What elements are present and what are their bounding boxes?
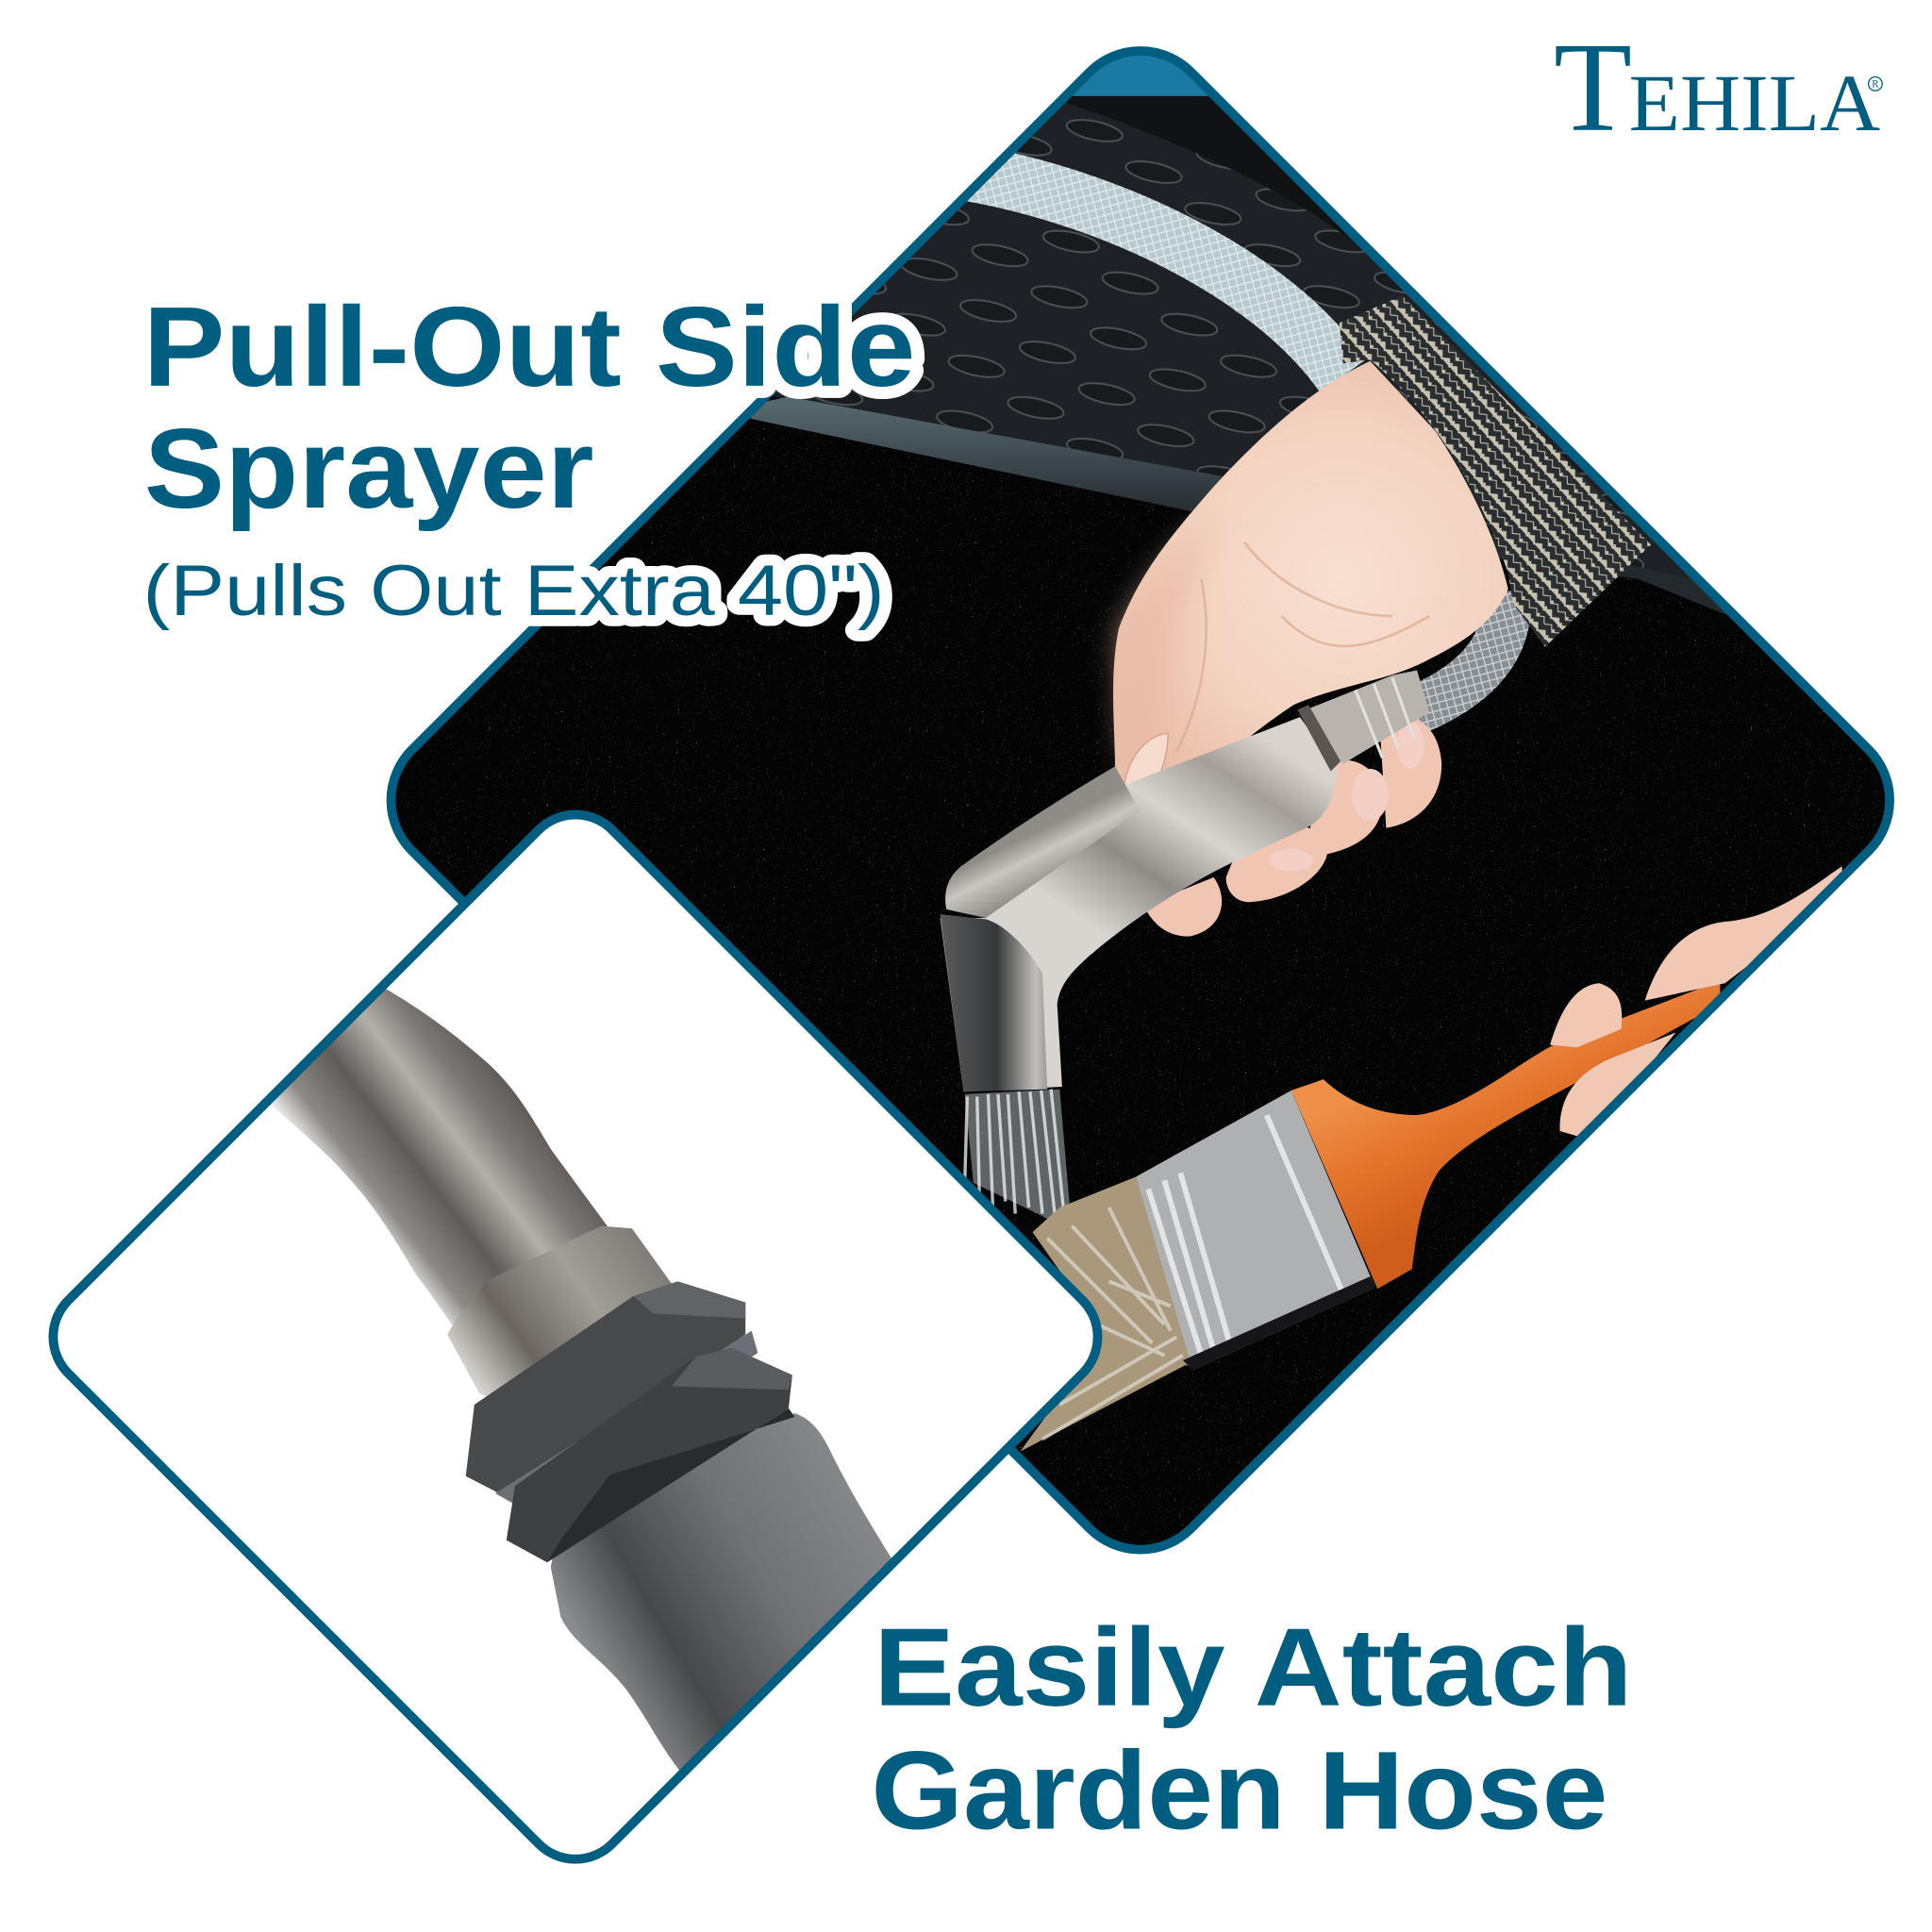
brush handle [1291,981,1720,1289]
dark mat shape [1066,96,1347,236]
thumb nail [1124,732,1169,785]
brushed nickel pipe [265,979,610,1331]
finger nails [1269,722,1424,871]
palm creases [1176,542,1429,752]
registered mark: R [1872,79,1879,91]
large diamond outline [361,22,1919,1579]
pipe collar [447,1226,690,1400]
registered mark [1869,77,1882,91]
fingers [1143,717,1441,937]
logo: Tehila: EHILA [1629,58,1880,148]
gray hose connector body [551,1413,899,1787]
hex nut lower [507,1348,792,1562]
heading: Easily Attach Garden Hose: Easily Attach [874,1606,1633,1729]
heading: Easily Attach Garden Hose [871,1606,1633,1852]
rubber ring [547,1408,794,1562]
hex nut upper [466,1281,745,1497]
sleeve knit cuff [1340,295,1651,647]
hose lower [1411,591,1507,712]
subheading: pulls out extra 40 inches: (Pulls Out Extra 40") [143,551,885,631]
second hand holding brush [1550,866,1842,1140]
heading: Easily Attach Garden Hose: Garden Hose [871,1728,1607,1852]
heading: Pull-Out Side Sprayer [143,284,915,631]
teal top corner [1072,55,1208,96]
small diamond outline [32,793,1119,1880]
photo background: black sink [395,396,1885,1545]
heading: Pull-Out Side Sprayer: Sprayer [144,406,594,532]
sprayer head [941,671,1429,1091]
nut lower facet [672,1348,792,1390]
nut groove [495,1331,758,1509]
panel: large diamond sprayer photo [387,46,1894,1555]
logo: Tehila [1554,17,1882,158]
ferrule dark edge [1183,1276,1375,1370]
paint brush [1020,981,1720,1452]
brush bristles [1020,1176,1198,1452]
panel: small diamond hose connector photo [32,793,1119,1880]
heading: Pull-Out Side Sprayer: Pull-Out Side [143,284,915,410]
thumb shading [1119,518,1214,764]
logo: Tehila: T [1554,17,1632,158]
water spray [965,1090,1072,1232]
speckled sink texture [370,382,1923,1565]
nut facet [633,1281,745,1319]
hand holding sprayer [1113,361,1508,804]
sink ledge [751,396,1728,615]
brush ferrule [1136,1091,1375,1370]
rubber sink mat [772,96,1690,579]
hose upper [967,173,1343,375]
